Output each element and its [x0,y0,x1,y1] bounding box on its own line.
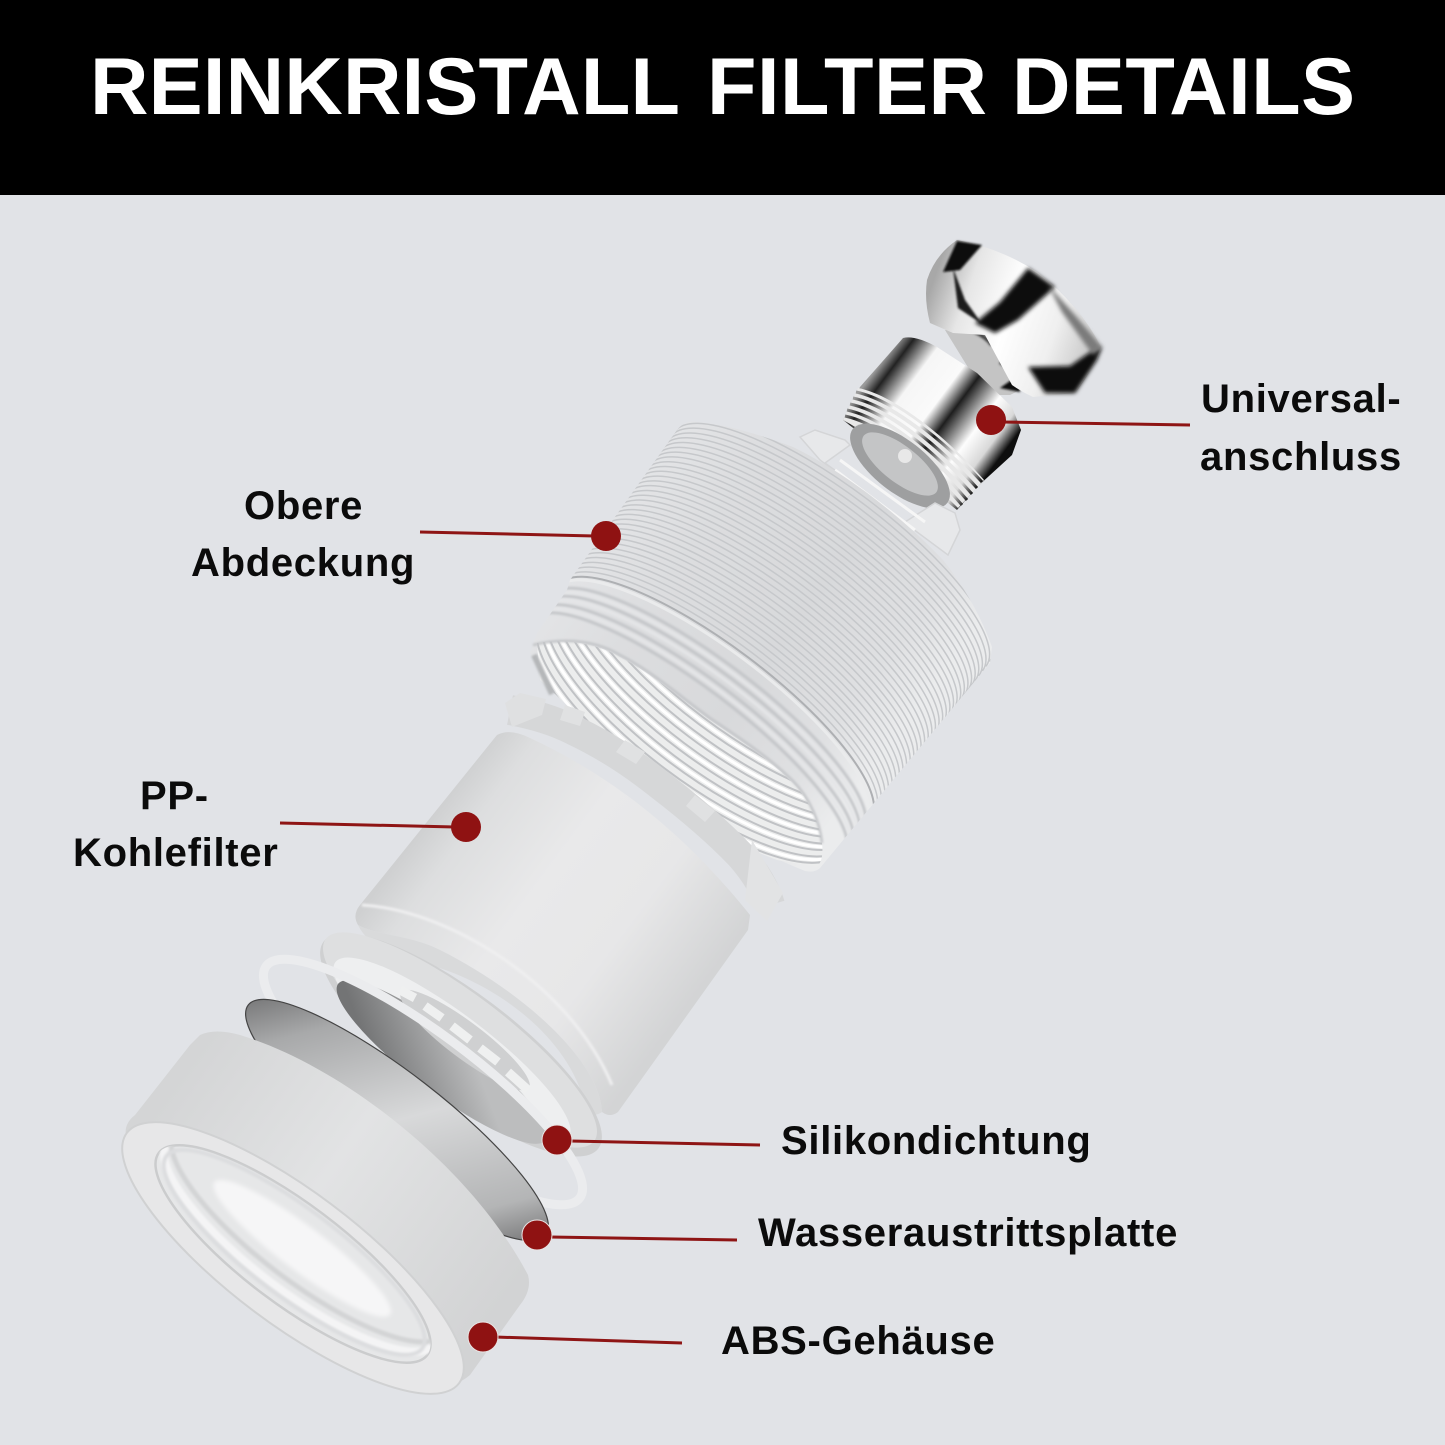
filter foam end [358,925,602,1115]
filter top ring [505,693,783,921]
callout: Silikondichtung [542,1125,760,1155]
universal connector [837,240,1102,523]
chrome body [843,337,1021,510]
cover opening [531,639,824,864]
label: ABS-Gehäuse: ABS-Gehäuse [721,1319,995,1363]
label: Wasseraustrittsplatte: Wasseraustrittsplatte [758,1211,1178,1255]
ABS housing [121,1032,529,1395]
callout: Obere Abdeckung [420,521,621,551]
label: Universal-anschluss [1200,377,1402,479]
chrome neck [945,322,1030,395]
label: Obere Abdeckung: Abdeckung [191,541,415,585]
label: Universal-anschluss: anschluss [1200,435,1402,479]
label: PP-Kohlefilter: Kohlefilter [73,831,278,875]
label: Silikondichtung: Silikondichtung [781,1119,1091,1163]
label: PP-Kohlefilter [73,774,278,875]
title: REINKRISTALL [90,42,680,132]
header banner [0,0,1445,195]
label: PP-Kohlefilter: PP- [140,774,209,818]
callout: Wasseraustrittsplatte [522,1220,737,1250]
title [90,42,1355,132]
label: Obere Abdeckung: Obere [244,484,363,528]
fine threads [550,422,990,838]
PP carbon filter [355,693,783,1115]
upper cover [531,422,992,872]
O-ring [237,926,609,1238]
water outlet plate [220,969,574,1271]
front face [87,1080,499,1436]
filter body [355,732,750,1115]
silicone seal and flange [292,900,630,1190]
threads [843,388,984,508]
title: FILTER [707,42,987,132]
callout: Universal-anschluss [976,405,1190,435]
inner thread [129,1113,457,1395]
title: DETAILS [1012,42,1355,132]
label: Universal-anschluss: Universal- [1201,377,1401,421]
callout: PP-Kohlefilter [280,812,481,842]
chrome cap [926,240,1102,397]
callout: ABS-Gehäuse [468,1322,682,1352]
label: Obere Abdeckung [191,484,415,585]
collar [800,430,960,555]
inner opening [837,409,963,523]
